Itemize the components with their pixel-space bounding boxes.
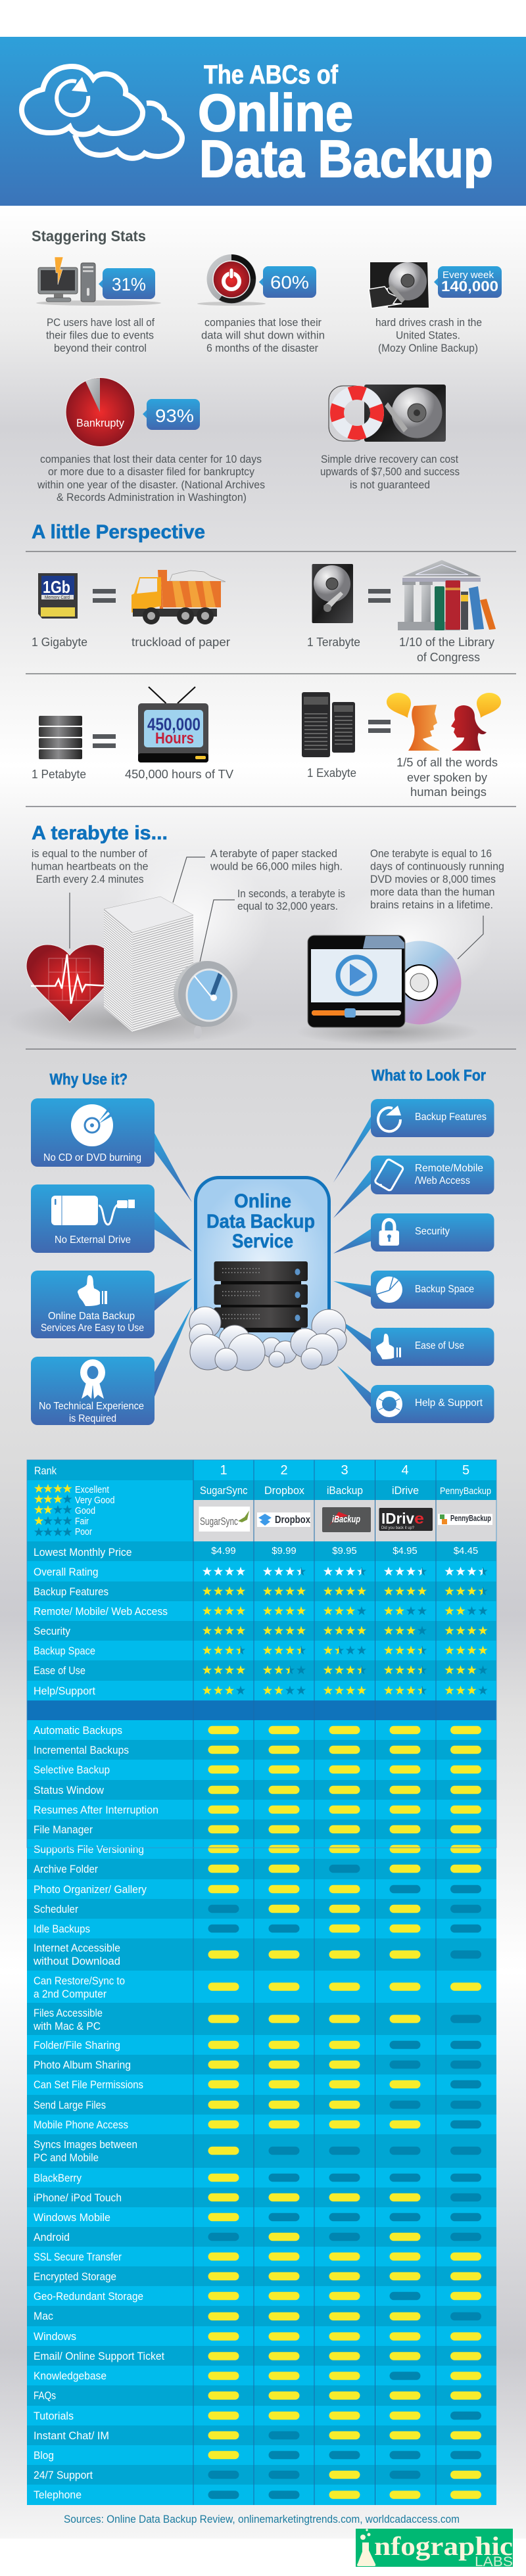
row: Mobile Phone Access bbox=[27, 2115, 496, 2134]
row: Send Large Files bbox=[27, 2095, 496, 2115]
logo: iBackup: iBackup bbox=[332, 1514, 360, 1525]
row: BlackBerry: BlackBerry bbox=[34, 2172, 82, 2184]
table header: 5 bbox=[462, 1463, 469, 1478]
callout: remote mobile web access: Remote/Mobile bbox=[415, 1163, 483, 1174]
header banner bbox=[0, 37, 526, 206]
row: iPhone/ iPod Touch bbox=[27, 2188, 496, 2207]
title: Data Backup bbox=[199, 129, 493, 188]
table header: SugarSync bbox=[200, 1484, 248, 1497]
row: Help/Support: Help/Support bbox=[34, 1685, 95, 1697]
title: Online bbox=[198, 83, 353, 142]
stat: 60%: 60% bbox=[270, 272, 309, 293]
row: Lowest Monthly Price: $9.95 bbox=[332, 1545, 357, 1557]
row: Idle Backups: Idle Backups bbox=[34, 1923, 90, 1935]
row: Archive Folder: Archive Folder bbox=[34, 1863, 98, 1875]
logo: Dropbox bbox=[257, 1512, 310, 1527]
clock fact: equal to 32,000 years. bbox=[237, 901, 338, 912]
row: Lowest Monthly Price: $4.95 bbox=[393, 1545, 418, 1557]
table header: 4 bbox=[401, 1463, 409, 1478]
legend bbox=[27, 1480, 193, 1541]
video and DVD fact: brains retains in a lifetime. bbox=[370, 899, 493, 911]
logo: PennyBackup bbox=[438, 1513, 492, 1525]
row: Syncs Images between PC and Mobile: Syncs Images between bbox=[34, 2139, 137, 2151]
callout: easy to use: Services Are Easy to Use bbox=[41, 1323, 144, 1334]
row: Photo Album Sharing: Photo Album Sharing bbox=[34, 2059, 131, 2071]
row: Help/Support bbox=[27, 1681, 496, 1700]
row: Encrypted Storage: Encrypted Storage bbox=[34, 2271, 116, 2283]
stat: 31%: 31% bbox=[112, 274, 146, 294]
comparison: petabyte to TV hours bbox=[32, 687, 233, 781]
row: File Manager bbox=[27, 1819, 496, 1839]
row: Files Accessible with Mac & PC: Files Accessible bbox=[34, 2007, 103, 2019]
callout: security bbox=[333, 1213, 494, 1253]
row: Email/ Online Support Ticket bbox=[27, 2346, 496, 2366]
row: Incremental Backups bbox=[27, 1740, 496, 1760]
stat: 140,000: hard drives crash in the bbox=[375, 317, 482, 329]
row: Windows: Windows bbox=[34, 2331, 76, 2343]
row: Supports File Versioning: Supports File Versioning bbox=[34, 1844, 144, 1856]
central panel: online data backup service bbox=[189, 1178, 347, 1370]
section: a terabyte is bbox=[7, 822, 504, 1046]
row: Remote/ Mobile/ Web Access: Remote/ Mobile/ Web Access bbox=[34, 1606, 168, 1618]
row: Resumes After Interruption bbox=[27, 1800, 496, 1819]
callout: security: Security bbox=[415, 1226, 450, 1237]
comparison: terabyte to library bbox=[307, 560, 496, 664]
stat: 93% bankruptcy pie: or more due to a disaster filed for bankruptcy bbox=[48, 466, 255, 478]
callout: easy to use bbox=[31, 1271, 192, 1338]
comparison: exabyte to spoken words: human beings bbox=[410, 785, 487, 799]
row: Folder/File Sharing: Folder/File Sharing bbox=[34, 2040, 120, 2051]
heading: A little Perspective bbox=[32, 521, 205, 543]
logo: IDrive: Did you back it up? bbox=[381, 1526, 415, 1530]
row: Automatic Backups bbox=[27, 1720, 496, 1740]
row: Android: Android bbox=[34, 2232, 70, 2243]
comparison: terabyte to library: 1/10 of the Library bbox=[399, 636, 494, 649]
row: File Manager: File Manager bbox=[34, 1824, 93, 1836]
comparison: terabyte to library: 1 Terabyte bbox=[307, 636, 360, 649]
callout: no technical experience: No Technical Experience bbox=[39, 1401, 144, 1412]
legend: Excellent bbox=[75, 1485, 109, 1495]
logo: infographic labs: nfographic bbox=[374, 2531, 513, 2561]
row: Windows bbox=[27, 2326, 496, 2346]
table header: 1 bbox=[220, 1463, 227, 1478]
row: Overall Rating: Overall Rating bbox=[34, 1566, 99, 1578]
row: Photo Organizer/ Gallery: Photo Organizer/ Gallery bbox=[34, 1884, 147, 1896]
row: Lowest Monthly Price: $4.45 bbox=[454, 1545, 478, 1557]
comparison: petabyte to TV hours: 450,000 bbox=[147, 714, 201, 734]
callout: backup space: Backup Space bbox=[415, 1284, 474, 1295]
paper stack fact: A terabyte of paper stacked bbox=[210, 848, 337, 860]
row: Internet Accessible without Download bbox=[27, 1938, 496, 1971]
heartbeats fact: human heartbeats on the bbox=[32, 861, 149, 873]
logo: IDrive: e bbox=[414, 1510, 424, 1527]
icon: clouds bbox=[189, 1307, 347, 1370]
row: Internet Accessible without Download: Internet Accessible bbox=[34, 1942, 120, 1954]
row: Can Restore/Sync to a 2nd Computer: Can Restore/Sync to bbox=[34, 1975, 125, 1987]
logo: infographic labs bbox=[356, 2529, 513, 2569]
row: Backup Space: Backup Space bbox=[34, 1645, 95, 1657]
section: a little perspective bbox=[26, 521, 516, 799]
row: Archive Folder bbox=[27, 1859, 496, 1879]
icon: cloud with refresh arrow bbox=[22, 66, 182, 158]
row: Ease of Use bbox=[27, 1660, 496, 1681]
comparison: gigabyte to truckload: 1 Gigabyte bbox=[32, 636, 87, 649]
heartbeats fact bbox=[26, 848, 149, 1022]
comparison: exabyte to spoken words: 1 Exabyte bbox=[307, 766, 356, 780]
row: Supports File Versioning bbox=[27, 1839, 496, 1859]
logo: SugarSync bbox=[199, 1507, 250, 1532]
row: Resumes After Interruption: Resumes After Interruption bbox=[34, 1804, 158, 1816]
callout: remote mobile web access: /Web Access bbox=[415, 1175, 470, 1186]
row: 24/7 Support: 24/7 Support bbox=[34, 2470, 93, 2481]
table header: iBackup bbox=[327, 1484, 363, 1497]
video and DVD fact: more data than the human bbox=[370, 886, 494, 898]
row: Can Restore/Sync to a 2nd Computer bbox=[27, 1971, 496, 2003]
row: Telephone bbox=[27, 2485, 496, 2505]
legend: Poor bbox=[75, 1527, 92, 1537]
row: Lowest Monthly Price: $9.99 bbox=[272, 1545, 297, 1557]
comparison: gigabyte to truckload: truckload of paper bbox=[132, 636, 230, 649]
callout: ease of use bbox=[334, 1317, 494, 1366]
stat: 31%: PC users have lost all of bbox=[47, 317, 155, 329]
table header: Dropbox bbox=[264, 1484, 304, 1497]
stat: 60%: companies that lose their bbox=[204, 317, 322, 329]
row: Lowest Monthly Price: Lowest Monthly Price bbox=[34, 1547, 132, 1558]
legend: Fair bbox=[75, 1516, 89, 1527]
comparison: petabyte to TV hours: 450,000 hours of TV bbox=[125, 768, 233, 781]
video and DVD fact: DVD movies or 8,000 times bbox=[370, 874, 496, 885]
callout: ease of use: Ease of Use bbox=[415, 1340, 464, 1351]
row: Idle Backups bbox=[27, 1919, 496, 1938]
row: Photo Album Sharing bbox=[27, 2055, 496, 2074]
row: Syncs Images between PC and Mobile bbox=[27, 2134, 496, 2168]
clock fact: In seconds, a terabyte is bbox=[237, 888, 345, 900]
table header bbox=[27, 1460, 496, 1500]
row: Knowledgebase bbox=[27, 2366, 496, 2385]
callout: no CD or DVD bbox=[31, 1098, 192, 1202]
callout: no CD or DVD: No CD or DVD burning bbox=[43, 1152, 141, 1163]
heartbeats fact: Earth every 2.4 minutes bbox=[36, 874, 144, 885]
section: staggering stats bbox=[32, 227, 502, 503]
section: staggering stats: Simple drive recovery can cost bbox=[321, 454, 458, 465]
title bbox=[198, 60, 493, 188]
row: Photo Organizer/ Gallery bbox=[27, 1879, 496, 1899]
sources: Sources: Online Data Backup Review, onlinemarketingtrends.com, worldcadaccess.com bbox=[64, 2513, 460, 2525]
comparison: gigabyte to truckload: Memory Card bbox=[45, 596, 70, 600]
stat: 140,000: (Mozy Online Backup) bbox=[378, 342, 478, 354]
row: Security: Security bbox=[34, 1626, 71, 1637]
stat: 31%: their files due to events bbox=[46, 330, 154, 342]
logo: IDrive: IDriv bbox=[381, 1510, 414, 1527]
video and DVD fact: days of continuously running bbox=[370, 861, 504, 873]
stat: 93% bankruptcy pie: within one year of the disaster. (National Archives bbox=[37, 479, 265, 491]
stat: 60%: 6 months of the disaster bbox=[206, 342, 318, 354]
central panel: online data backup service: Online bbox=[234, 1190, 291, 1212]
callout: help and support: Help & Support bbox=[415, 1397, 483, 1409]
comparison: petabyte to TV hours: Hours bbox=[155, 730, 194, 747]
row: BlackBerry bbox=[27, 2168, 496, 2188]
comparison table bbox=[27, 1460, 496, 2505]
row: Android bbox=[27, 2227, 496, 2247]
callout: backup features bbox=[333, 1099, 494, 1183]
table divider band bbox=[27, 1700, 496, 1720]
row: Lowest Monthly Price: $4.99 bbox=[211, 1545, 236, 1557]
stat: 140,000 bbox=[369, 262, 502, 354]
row: Incremental Backups: Incremental Backups bbox=[34, 1745, 129, 1756]
row: Backup Features bbox=[27, 1581, 496, 1601]
stat: 93% bankruptcy pie: Bankrupty bbox=[76, 417, 124, 429]
row: Windows Mobile bbox=[27, 2207, 496, 2227]
heading: why use it: Why Use it? bbox=[50, 1071, 128, 1089]
stat: 31% bbox=[36, 257, 161, 354]
table header: iDrive bbox=[392, 1484, 419, 1497]
icon: server stack bbox=[214, 1261, 308, 1332]
row: SSL Secure Transfer bbox=[27, 2247, 496, 2266]
stat: 31%: beyond their control bbox=[54, 342, 147, 354]
comparison: exabyte to spoken words: ever spoken by bbox=[407, 771, 487, 784]
section: why use it and what to look for bbox=[31, 1067, 494, 1425]
row: iPhone/ iPod Touch: iPhone/ iPod Touch bbox=[34, 2192, 122, 2204]
row: FAQs bbox=[27, 2385, 496, 2406]
row: Blog bbox=[27, 2445, 496, 2465]
callout: remote mobile web access bbox=[333, 1156, 494, 1218]
clock fact bbox=[174, 888, 345, 1039]
central panel: online data backup service: Service bbox=[232, 1230, 293, 1252]
row: Windows Mobile: Windows Mobile bbox=[34, 2212, 110, 2224]
row: Scheduler: Scheduler bbox=[34, 1904, 78, 1915]
row: Geo-Redundant Storage: Geo-Redundant Storage bbox=[34, 2291, 143, 2303]
title: The ABCs of bbox=[204, 60, 339, 89]
row: Geo-Redundant Storage bbox=[27, 2286, 496, 2306]
row: Selective Backup bbox=[27, 1760, 496, 1780]
heading: A terabyte is... bbox=[32, 822, 168, 844]
table header: PennyBackup bbox=[440, 1486, 491, 1497]
table header: 3 bbox=[341, 1463, 348, 1478]
central panel: online data backup service: Data Backup bbox=[206, 1211, 315, 1232]
logo: IDrive bbox=[379, 1508, 433, 1531]
row: Lowest Monthly Price bbox=[27, 1541, 496, 1561]
stat: 140,000: United States. bbox=[396, 330, 460, 342]
row: Mobile Phone Access: Mobile Phone Access bbox=[34, 2119, 128, 2131]
stat: 60% bbox=[197, 254, 325, 354]
stat: 60%: data will shut down within bbox=[201, 330, 325, 342]
legend: Good bbox=[75, 1506, 95, 1516]
row: Automatic Backups: Automatic Backups bbox=[34, 1725, 122, 1737]
row: Tutorials bbox=[27, 2406, 496, 2425]
row: Blog: Blog bbox=[34, 2450, 54, 2462]
row: Tutorials: Tutorials bbox=[34, 2410, 74, 2422]
provider logos bbox=[193, 1500, 496, 1541]
logo: Dropbox: Dropbox bbox=[275, 1514, 310, 1526]
row: Can Set File Permissions bbox=[27, 2074, 496, 2095]
callout: no external drive bbox=[31, 1184, 192, 1253]
stat: 140,000: 140,000 bbox=[441, 278, 498, 294]
paper stack fact bbox=[104, 848, 343, 1032]
row: Backup Features: Backup Features bbox=[34, 1586, 108, 1598]
row: Security bbox=[27, 1621, 496, 1641]
legend: Very Good bbox=[75, 1495, 114, 1506]
stat: 93% bankruptcy pie: 93% bbox=[155, 406, 194, 426]
row: Encrypted Storage bbox=[27, 2266, 496, 2286]
stat: 93% bankruptcy pie: & Records Administration in Washington) bbox=[57, 492, 247, 503]
logo: SugarSync: SugarSync bbox=[200, 1515, 238, 1528]
row: Send Large Files: Send Large Files bbox=[34, 2099, 106, 2111]
row: 24/7 Support bbox=[27, 2465, 496, 2485]
stat: 93% bankruptcy pie bbox=[37, 377, 265, 503]
row: Files Accessible with Mac & PC: with Mac & PC bbox=[33, 2021, 101, 2032]
row: Mac: Mac bbox=[34, 2310, 53, 2322]
row: SSL Secure Transfer: SSL Secure Transfer bbox=[34, 2251, 122, 2263]
logo: infographic labs: LABS bbox=[475, 2554, 513, 2569]
row: Can Restore/Sync to a 2nd Computer: a 2nd Computer bbox=[34, 1988, 107, 2000]
row: Telephone: Telephone bbox=[34, 2489, 82, 2501]
row: Instant Chat/ IM bbox=[27, 2425, 496, 2445]
callout: backup space bbox=[333, 1271, 494, 1309]
stat: 93% bankruptcy pie: companies that lost their data center for 10 days bbox=[40, 454, 262, 465]
comparison: exabyte to spoken words: 1/5 of all the words bbox=[396, 756, 498, 769]
row: Instant Chat/ IM: Instant Chat/ IM bbox=[34, 2430, 109, 2442]
stat: 140,000: Every week bbox=[442, 269, 494, 281]
comparison: gigabyte to truckload bbox=[32, 570, 230, 649]
comparison: petabyte to TV hours: 1 Petabyte bbox=[32, 768, 86, 781]
heading: Staggering Stats bbox=[32, 227, 146, 245]
row: Folder/File Sharing bbox=[27, 2035, 496, 2055]
logo: PennyBackup: PennyBackup bbox=[450, 1513, 491, 1523]
callout: easy to use: Online Data Backup bbox=[48, 1311, 135, 1322]
comparison: exabyte to spoken words bbox=[302, 692, 501, 799]
row: Knowledgebase: Knowledgebase bbox=[34, 2370, 107, 2382]
section: staggering stats: is not guaranteed bbox=[350, 479, 430, 491]
row: Backup Space bbox=[27, 1641, 496, 1660]
row: Mac bbox=[27, 2306, 496, 2326]
row: Scheduler bbox=[27, 1899, 496, 1919]
callout: help and support bbox=[337, 1366, 494, 1423]
row: Can Set File Permissions: Can Set File Permissions bbox=[34, 2079, 143, 2091]
callout: no technical experience: is Required bbox=[69, 1413, 116, 1424]
stat: drive recovery lifebuoy bbox=[329, 385, 446, 442]
callout: no external drive: No External Drive bbox=[55, 1234, 131, 1246]
table header: 2 bbox=[280, 1463, 288, 1478]
row: Status Window: Status Window bbox=[34, 1785, 104, 1796]
callout: backup features: Backup Features bbox=[415, 1112, 487, 1123]
comparison: terabyte to library: of Congress bbox=[417, 651, 480, 664]
row: Syncs Images between PC and Mobile: PC and Mobile bbox=[34, 2152, 99, 2164]
callout: no technical experience bbox=[31, 1306, 192, 1425]
video and DVD fact: One terabyte is equal to 16 bbox=[370, 848, 492, 860]
row: Overall Rating bbox=[27, 1561, 496, 1581]
section: staggering stats: upwards of $7,500 and success bbox=[320, 466, 460, 478]
row: Status Window bbox=[27, 1780, 496, 1800]
paper stack fact: would be 66,000 miles high. bbox=[210, 861, 343, 873]
row: Remote/ Mobile/ Web Access bbox=[27, 1601, 496, 1621]
comparison: gigabyte to truckload: 1Gb bbox=[43, 577, 70, 597]
logo: iBackup bbox=[322, 1507, 371, 1532]
heading: what to look for: What to Look For bbox=[371, 1067, 486, 1085]
video and DVD fact bbox=[308, 848, 504, 1027]
row: Selective Backup: Selective Backup bbox=[34, 1764, 110, 1776]
row: Files Accessible with Mac & PC bbox=[27, 2003, 496, 2035]
row: Ease of Use: Ease of Use bbox=[34, 1665, 85, 1677]
row: Email/ Online Support Ticket: Email/ Online Support Ticket bbox=[34, 2351, 164, 2362]
row: FAQs: FAQs bbox=[34, 2390, 56, 2402]
heartbeats fact: is equal to the number of bbox=[32, 848, 147, 860]
table header: Rank bbox=[34, 1464, 57, 1477]
row: Internet Accessible without Download: without Download bbox=[33, 1955, 120, 1967]
